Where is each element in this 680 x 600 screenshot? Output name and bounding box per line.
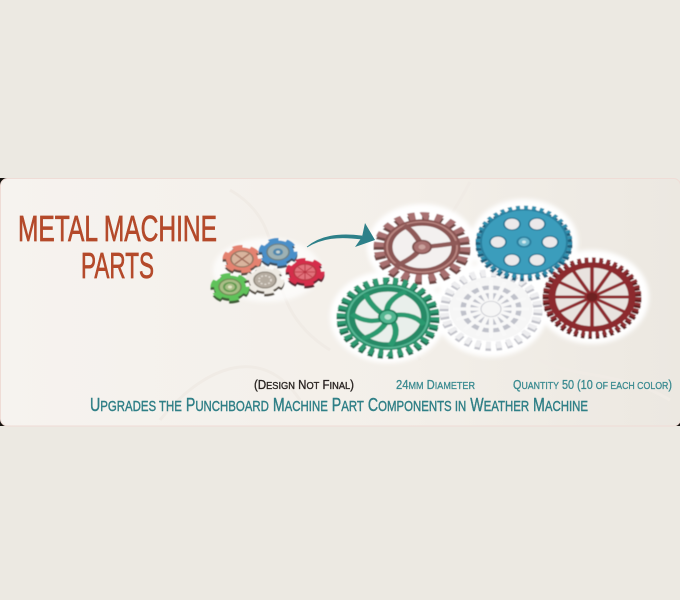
panel: banner background: [0, 178, 680, 426]
caption: quantity: QUANTITY 50 (10 OF EACH COLOR): [513, 377, 672, 392]
icon: pink token: [225, 247, 259, 274]
icon: green token: [213, 275, 247, 302]
arrow: [307, 223, 375, 247]
icon: dark red gear: [546, 260, 638, 336]
title: PARTS: [81, 245, 154, 286]
caption: design not final: (DESIGN NOT FINAL): [254, 377, 354, 392]
icon: white token: [248, 268, 282, 295]
icon: blue token: [261, 240, 295, 267]
subtitle: UPGRADES THE PUNCHBOARD MACHINE PART COMPONENTS IN WEATHER MACHINE: [90, 395, 588, 415]
icon: teal gear: [479, 208, 569, 279]
icon: green gear: [341, 281, 435, 356]
caption: diameter: 24MM DIAMETER: [396, 377, 475, 392]
gears cluster: [330, 199, 649, 363]
white halo behind gears: [330, 199, 649, 363]
title: [18, 208, 217, 286]
icon: red token: [288, 260, 322, 287]
icon: white gear: [444, 273, 538, 348]
icon: pink-brown gear: [379, 216, 465, 281]
icon: punchboard tokens group: [213, 238, 322, 302]
title: METAL MACHINE: [18, 208, 217, 249]
